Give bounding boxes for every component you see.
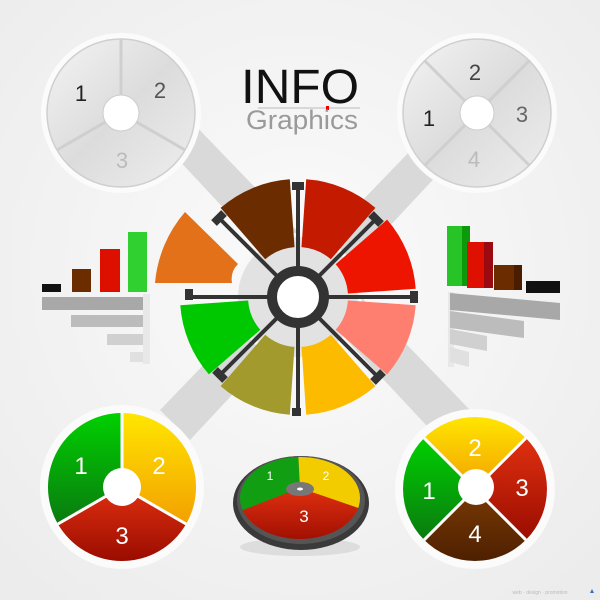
- center gray disc: [236, 235, 360, 359]
- top-left silver pie: 2: [154, 78, 166, 103]
- top-left silver pie: 1: [75, 81, 87, 106]
- bottom-left colored pie: 1: [74, 453, 88, 480]
- bottom-left colored pie: 2: [152, 453, 166, 480]
- watermark: web · design · promotion: [512, 590, 568, 596]
- diagonal connector bands: [160, 120, 470, 440]
- hub: [272, 271, 324, 323]
- spokes: [189, 186, 414, 412]
- middle dial: 3: [299, 507, 309, 526]
- top-right silver pie: 2: [469, 60, 481, 85]
- middle dial: 2: [323, 469, 330, 483]
- left bar chart: [42, 232, 150, 364]
- top-right silver pie: 3: [516, 102, 528, 127]
- bottom-right colored pie: 2: [468, 435, 482, 462]
- middle dial: [230, 450, 370, 556]
- watermark: [512, 589, 594, 596]
- bottom-right colored pie: 4: [468, 521, 482, 548]
- central wheel: [155, 179, 416, 415]
- title: [241, 61, 360, 135]
- bottom-right colored pie: 1: [422, 478, 436, 505]
- title: INFO: [241, 61, 359, 114]
- top-left silver pie: 3: [116, 148, 128, 173]
- title: Graphics: [246, 105, 358, 135]
- bottom-left colored pie: 3: [115, 523, 129, 550]
- bottom-left colored pie: [40, 405, 204, 569]
- top-left silver pie: [41, 33, 201, 193]
- bottom-right colored pie: 3: [515, 475, 529, 502]
- top-right silver pie: [397, 33, 557, 193]
- top-right silver pie: 4: [468, 147, 480, 172]
- top-right silver pie: 1: [423, 106, 435, 131]
- right bar chart: [447, 226, 560, 367]
- bottom-right colored pie: [395, 409, 555, 569]
- middle dial: 1: [267, 469, 274, 483]
